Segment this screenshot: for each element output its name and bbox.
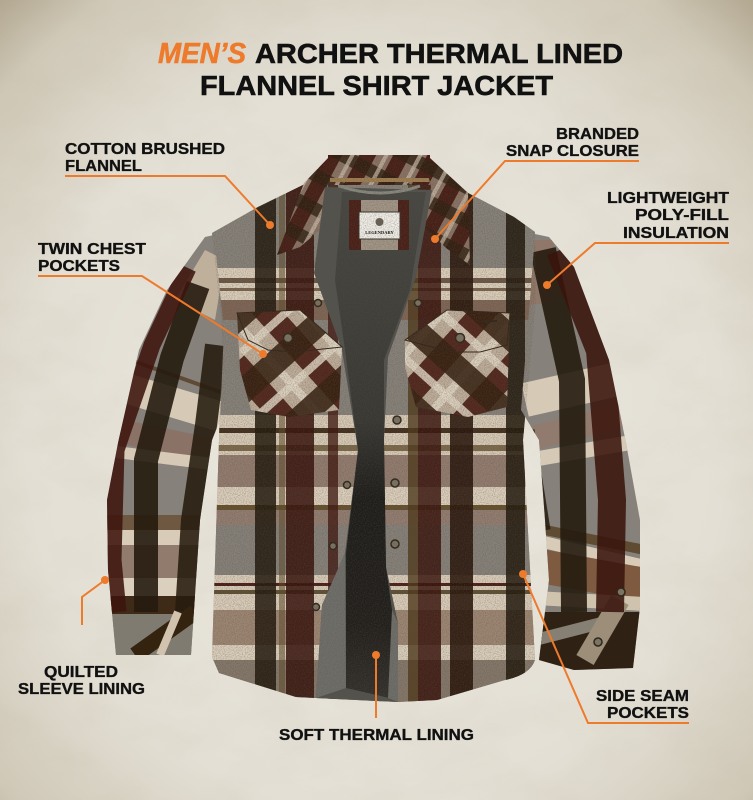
title	[158, 38, 623, 101]
callout: quilted sleeve lining	[18, 576, 145, 698]
callout: cotton brushed flannel: FLANNEL	[65, 158, 142, 175]
callout: side seam pockets: POCKETS	[607, 705, 689, 722]
jacket illustration	[100, 150, 645, 710]
snap buttons	[284, 300, 625, 646]
callout: side seam pockets	[519, 570, 689, 723]
callout: side seam pockets: SIDE SEAM	[596, 688, 689, 705]
callout: soft thermal lining: SOFT THERMAL LINING	[279, 727, 474, 744]
left sleeve	[107, 236, 224, 655]
collar	[277, 155, 470, 265]
title: MEN’S	[158, 38, 247, 70]
jacket body	[212, 183, 536, 702]
fabric grain	[200, 150, 550, 710]
neck tag	[339, 186, 420, 250]
right chest pocket	[405, 310, 510, 417]
callout: lightweight poly-fill insulation: LIGHTWEIGHT	[607, 190, 729, 207]
right sleeve	[521, 234, 640, 670]
callout: lightweight poly-fill insulation: POLY-FILL	[635, 207, 729, 224]
callout: cotton brushed flannel: COTTON BRUSHED	[65, 141, 225, 158]
callout: twin chest pockets: POCKETS	[38, 258, 120, 275]
callout: soft thermal lining	[279, 651, 474, 744]
title: FLANNEL SHIRT JACKET	[200, 70, 553, 101]
left chest pocket	[237, 310, 342, 417]
callout: quilted sleeve lining: QUILTED	[44, 664, 118, 681]
callout: branded snap closure	[431, 126, 639, 243]
callout: twin chest pockets: TWIN CHEST	[38, 241, 146, 258]
callout: lightweight poly-fill insulation: INSULATION	[623, 225, 729, 242]
callout: cotton brushed flannel	[65, 141, 274, 229]
callout: quilted sleeve lining: SLEEVE LINING	[18, 681, 145, 698]
callout: lightweight poly-fill insulation	[543, 190, 729, 289]
title: ARCHER THERMAL LINED	[255, 38, 623, 69]
neck tag: LEGENDARY	[365, 230, 395, 235]
thermal lining	[314, 187, 432, 702]
callout: branded snap closure: SNAP CLOSURE	[506, 143, 639, 160]
callout: twin chest pockets	[38, 241, 267, 358]
callout: branded snap closure: BRANDED	[556, 126, 639, 143]
